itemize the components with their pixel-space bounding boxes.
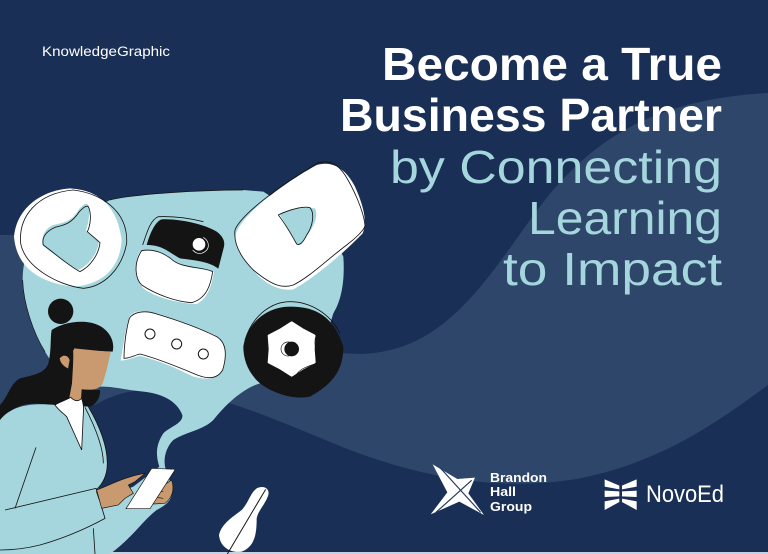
phone xyxy=(126,468,175,509)
wallet top outline xyxy=(143,217,203,245)
gear outer arc xyxy=(245,302,340,340)
play triangle fill xyxy=(279,208,316,245)
gear crescent xyxy=(281,342,295,356)
star shape xyxy=(431,464,484,515)
logo: NovoEd xyxy=(605,479,724,510)
title xyxy=(340,38,722,295)
face xyxy=(69,348,111,401)
woman xyxy=(0,299,175,554)
title line: Learning: Learning xyxy=(528,192,722,244)
title line: bold white: Become a True xyxy=(382,38,722,90)
play card outline xyxy=(235,162,365,286)
illustration xyxy=(0,162,365,554)
play card xyxy=(235,164,365,290)
wallet bottom xyxy=(136,251,214,304)
bottom edge strip xyxy=(0,552,768,554)
gear cog edge xyxy=(295,322,317,377)
hair bun xyxy=(48,299,73,324)
icon: wallet xyxy=(136,217,224,304)
logo text xyxy=(490,470,547,514)
bulb body xyxy=(219,487,269,552)
chat dot 1 xyxy=(145,329,155,339)
gear disc xyxy=(243,307,343,398)
icon: gear xyxy=(243,302,343,398)
phone holding hand xyxy=(143,480,173,504)
thought bubble xyxy=(23,190,344,554)
background wave xyxy=(0,93,768,484)
gear cog xyxy=(269,322,315,376)
logo mark: star xyxy=(431,464,484,515)
shirt collar xyxy=(55,397,84,450)
sweater xyxy=(0,404,107,554)
icon: light bulb xyxy=(219,487,269,554)
title line: by Connecting: by Connecting xyxy=(390,141,722,193)
bulb line xyxy=(227,489,266,554)
ear xyxy=(59,355,70,369)
finger lines xyxy=(144,490,163,498)
wallet clasp xyxy=(193,238,205,251)
icon: play button xyxy=(235,162,365,290)
title line: bold white second: Business Partner xyxy=(340,89,722,141)
brand label: KnowledgeGraphic xyxy=(42,44,170,59)
logo: Brandon Hall Group xyxy=(431,464,547,515)
chat body xyxy=(121,311,225,379)
chat outline xyxy=(124,312,225,378)
bubble outline strokes xyxy=(23,190,243,352)
thumb outline xyxy=(43,206,100,272)
icon: thumbs up xyxy=(14,188,127,288)
title line: to Impact: to Impact xyxy=(503,243,722,295)
logo mark: bars xyxy=(605,479,637,510)
pointing hand xyxy=(97,473,145,508)
wallet clasp ring xyxy=(193,237,208,254)
logo text: NovoEd xyxy=(646,481,724,508)
wallet bottom outline xyxy=(136,250,213,303)
logo word: Hall: Hall xyxy=(490,484,516,499)
thumb badge xyxy=(14,188,122,287)
logo word: Brandon: Brandon xyxy=(490,470,547,485)
chat dot 2 xyxy=(172,339,182,349)
gear hole xyxy=(284,342,299,356)
sweater lines xyxy=(0,407,107,554)
thumb fill xyxy=(42,204,99,270)
wallet top xyxy=(147,219,224,269)
play triangle outline xyxy=(278,207,313,244)
long hair xyxy=(0,322,113,420)
badge outline xyxy=(20,190,127,288)
chat dot 3 xyxy=(198,349,208,359)
icon: chat bubble xyxy=(121,311,225,379)
star cut lines xyxy=(436,468,481,512)
logo word: Group: Group xyxy=(490,499,532,514)
